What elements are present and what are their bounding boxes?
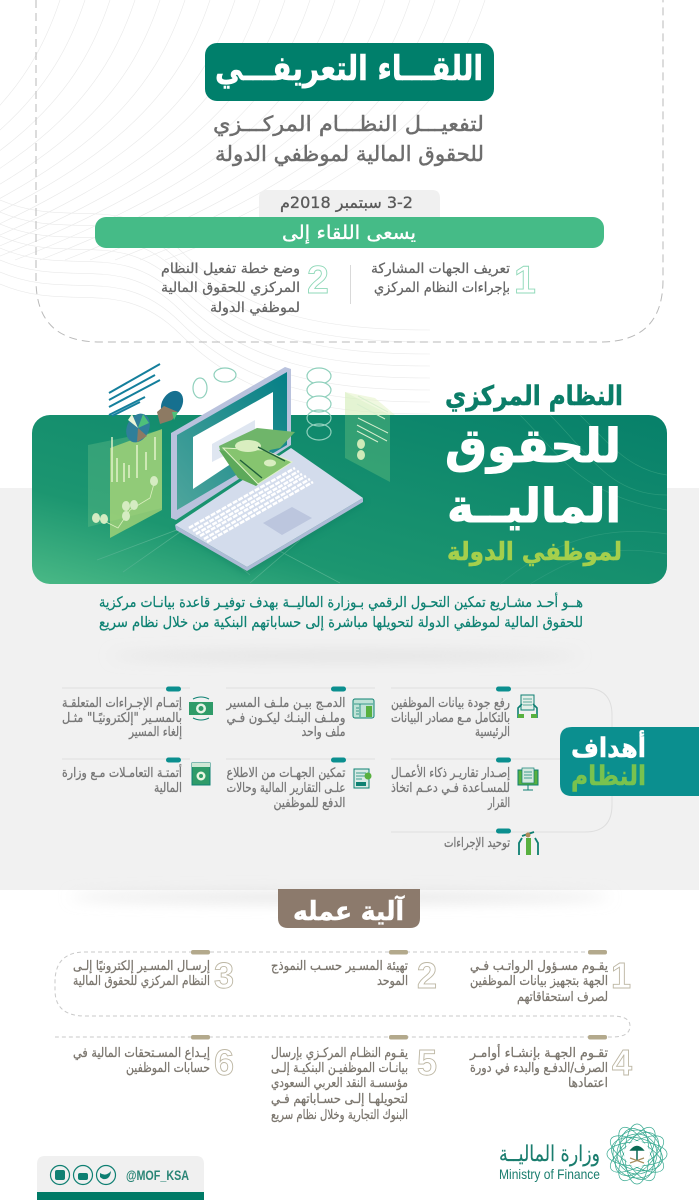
step 1: الجهة بتجهيز بيانات الموظفين [470, 974, 608, 989]
objective 2: وملـف البنـك ليكـون فـي [226, 711, 346, 726]
aim 2: 2 [307, 259, 329, 302]
ministry logo: Ministry of Finance [499, 1166, 600, 1182]
date pill [259, 190, 440, 222]
green bar heading [95, 217, 604, 248]
intro paragraph: للحقوق المالية لموظفي الدولة لتحويلها مباشرة إلى حساباتهم البنكية من خلال نظام سريع [99, 615, 583, 631]
intro paragraph: هــو أحـد مشـاريع تمكين التحـول الرقمي بـوزارة الماليــة بهدف توفيـر قاعدة بيانـات مركزية [99, 592, 583, 611]
aim 1: تعريف الجهات المشاركة [371, 261, 510, 277]
objective 3: بالمسـير "إلكترونيًـا" مثـل [62, 711, 182, 726]
background wave pattern [0, 0, 485, 414]
title badge: اللقـــاء التعريفـــي [215, 49, 483, 89]
illustration: right document panel [345, 392, 395, 482]
aim 1: بإجراءات النظام المركزي [374, 280, 510, 296]
step 4: 4 [612, 1042, 632, 1083]
paragraph shadow [110, 652, 580, 660]
step 5: البنوك التجارية وخلال نظام سريع [271, 1108, 408, 1123]
objective 3: إتمـام الإجـراءات المتعلقـة [62, 696, 182, 711]
objective 3: إلغاء المسير [128, 725, 182, 740]
shadow under grey panel [70, 892, 610, 902]
title badge [205, 43, 494, 101]
subtitle: للحقوق المالية لموظفي الدولة [215, 142, 484, 166]
objective 4 [391, 764, 510, 811]
step 4: الصرف/الدفـع والبدء في دورة [470, 1061, 608, 1076]
step 5: بيانـات الموظفيـن البنكيـة إلـى [271, 1061, 408, 1076]
aim 1: 1 [514, 259, 536, 302]
objective 2: الدمـج بيـن ملـف المسير [226, 696, 346, 711]
step 6 [73, 1042, 234, 1083]
objective 4: إصـدار تقاريـر ذكاء الأعمـال [391, 764, 510, 781]
objectives badge: أهداف [571, 730, 646, 764]
objectives connector lines [62, 688, 612, 832]
dashed frame: intro section [36, 0, 663, 342]
objective 1: الرئيسية [475, 725, 510, 740]
objectives label tabs [166, 686, 511, 834]
banner heading text [445, 381, 623, 567]
objectives badge: النظام [571, 761, 646, 792]
step 5: يقـوم النظـام المركـزي بإرسال [271, 1046, 408, 1061]
step 6: 6 [214, 1042, 234, 1083]
banner heading text: للحقوق [445, 419, 621, 474]
ministry logo [499, 1122, 669, 1186]
icon: cash [189, 697, 213, 720]
icon: merged files [353, 699, 374, 718]
objective 6 [62, 764, 182, 796]
step 3: 3 [214, 955, 234, 996]
step 4: تقـوم الجهـة بإنشـاء أوامـر [469, 1044, 608, 1061]
process tabs [191, 950, 607, 1040]
subtitle: لتفعيـــل النظـــام المركـــزي [213, 112, 484, 136]
objective 3 [62, 696, 182, 740]
how it works tab [278, 889, 420, 928]
icon: report page [354, 769, 372, 788]
ministry logo: وزارة الماليــة [499, 1142, 600, 1167]
objective 6: أتمتـة التعامـلات مـع وزارة [62, 764, 182, 781]
divider [350, 265, 352, 304]
objective 1 [391, 696, 510, 740]
objective 7: توحيد الإجراءات [444, 836, 510, 851]
objective 1: رفع جودة بيانات الموظفين [391, 696, 510, 711]
illustration: left chart panel [88, 429, 162, 538]
step 5: لتحويلهـا إلـى حسـاباتهم فـي [271, 1092, 408, 1107]
green bar heading: يسعى اللقاء إلى [282, 222, 416, 245]
step 4: اعتمادها [568, 1076, 608, 1091]
objective 4: للمسـاعدة فـي دعـم اتخاذ [391, 781, 510, 796]
step 3: إرسـال المسـير إلكترونيًا إلـى [73, 959, 210, 974]
step 6: حسابات الموظفين [126, 1061, 210, 1076]
aim 2: وضع خطة تفعيل النظام [161, 261, 300, 277]
objective 5: تمكين الجهـات من الاطلاع [226, 766, 346, 781]
banner panel [32, 415, 667, 584]
objective 5: الدفع للموظفين [274, 796, 346, 811]
step 3: النظام المركزي للحقوق المالية [73, 974, 210, 989]
aim 2 [161, 259, 329, 316]
icon: joined hands [519, 832, 538, 855]
banner heading text: النظام المركزي [445, 381, 623, 412]
step 2: تهيئة المسـير حسـب النموذج [271, 959, 408, 974]
objective 6: المالية [154, 781, 182, 796]
aim 2: لموظفي الدولة [210, 300, 300, 316]
icon: hands and tablet [518, 695, 537, 718]
step 5 [271, 1042, 437, 1123]
social media box: @MOF_KSA [126, 1167, 189, 1183]
icon: monitor report [518, 768, 538, 790]
aim 1 [371, 259, 536, 302]
step 1: يقـوم مسـؤول الرواتـب فـي [470, 959, 608, 974]
illustration: laptop [171, 367, 365, 574]
objective 5: علـى التقارير المالية وحالات [226, 781, 346, 796]
step 3 [73, 955, 234, 996]
illustration: coins [193, 368, 331, 440]
step 2 [271, 955, 437, 996]
date pill: 3-2 سبتمبر 2018م [280, 193, 413, 213]
illustration: pie charts [122, 387, 188, 446]
banner heading text: لموظفي الدولة [447, 537, 622, 567]
objective 1: بالتكامل مـع مصادر البيانات [391, 711, 510, 726]
illustration: blue text lines [109, 364, 160, 416]
objective 4: القرار [487, 796, 510, 811]
objective 2 [226, 696, 346, 740]
icon: gear document [192, 763, 210, 785]
step 4 [469, 1042, 632, 1091]
objective 5 [226, 766, 346, 811]
step 1: لصرف استحقاقاتهم [517, 990, 608, 1005]
objective 2: ملف واحد [302, 725, 346, 740]
objectives badge [560, 727, 699, 796]
step 5: مؤسسـة النقد العربي السعودي [271, 1076, 408, 1091]
intro paragraph [99, 592, 583, 631]
step 6: إيـداع المسـتحقات المالية في [73, 1046, 210, 1061]
aim 2: المركزي للحقوق المالية [161, 280, 300, 296]
subtitle [213, 112, 484, 166]
step 2: الموحد [377, 974, 408, 989]
step 2: 2 [417, 955, 437, 996]
social media box [37, 1156, 204, 1200]
dashed process path [55, 952, 630, 1037]
how it works tab: آلية عمله [293, 895, 405, 927]
grey background panel [0, 488, 699, 890]
step 1: 1 [611, 955, 631, 996]
step 1 [470, 955, 631, 1005]
step 5: 5 [417, 1042, 437, 1083]
banner heading text: الماليــة [447, 479, 621, 534]
